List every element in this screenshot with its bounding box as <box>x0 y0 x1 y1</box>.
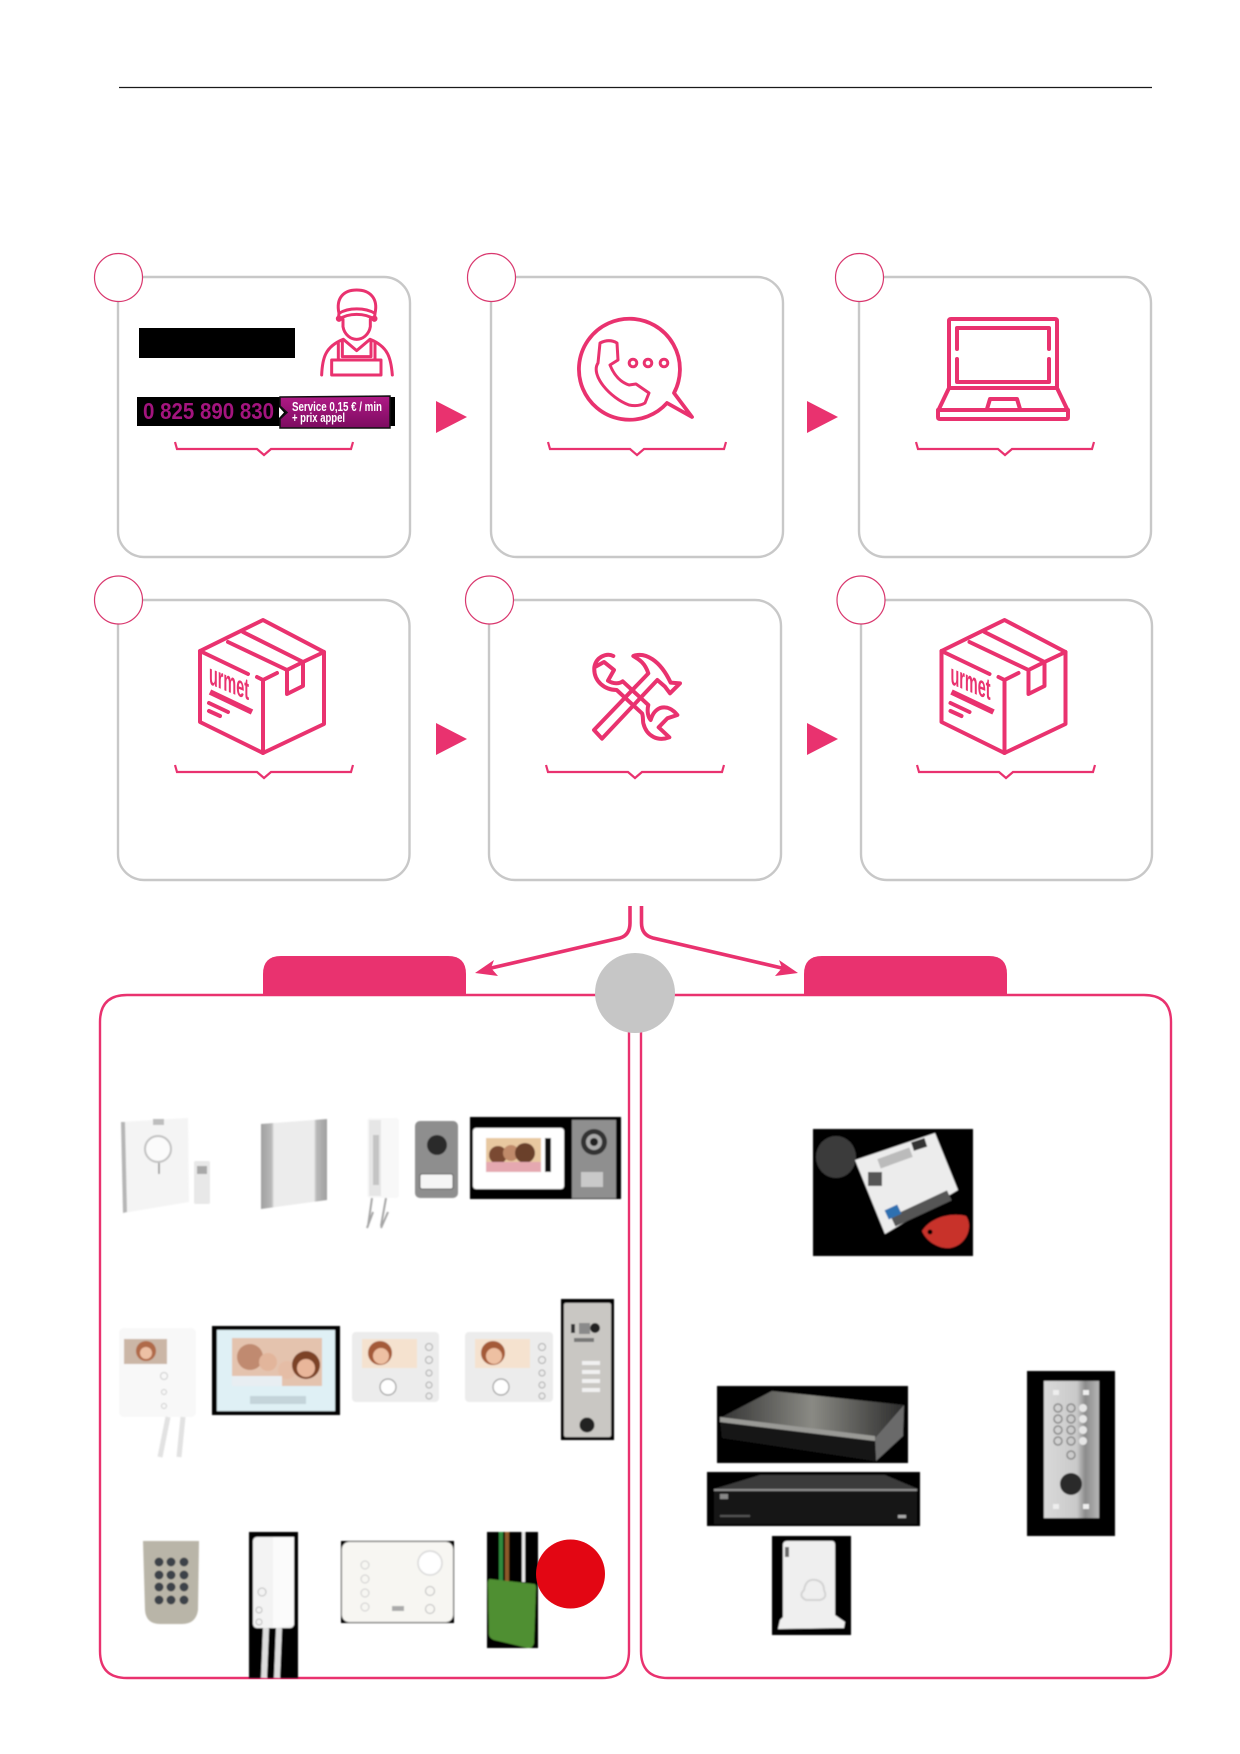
product: access control module <box>813 1129 973 1256</box>
price tag <box>280 396 390 428</box>
tab: left heading <box>263 956 466 995</box>
arrow 1 <box>436 401 467 433</box>
panel: left product range <box>100 956 629 1678</box>
product: monitor A <box>352 1332 439 1402</box>
step card 3: laptop <box>836 254 1151 557</box>
step number circle 4 <box>94 576 142 624</box>
product: green relay module <box>487 1532 538 1648</box>
step card 2: call <box>468 254 783 557</box>
icon: phone speech bubble <box>579 319 692 420</box>
heading bar <box>139 328 295 358</box>
product: steel keypad panel <box>1027 1371 1115 1536</box>
arrow 2 <box>807 401 838 433</box>
brace <box>175 442 353 455</box>
panel: right product range <box>641 956 1171 1678</box>
step number circle 3 <box>836 254 884 302</box>
top rule <box>119 86 1152 88</box>
red key fob <box>922 1215 969 1248</box>
icon: Urmet box <box>200 620 324 753</box>
price tag: + prix appel <box>292 411 345 425</box>
brace <box>916 442 1094 455</box>
product: flat recorder <box>717 1386 908 1463</box>
product: cloud box <box>772 1536 851 1635</box>
product: handset and door panel <box>367 1118 458 1228</box>
brace <box>175 765 353 778</box>
arrow 3 <box>436 723 467 755</box>
icon: Urmet box: urmet <box>950 658 991 708</box>
icon: Urmet box: urmet <box>209 658 249 708</box>
phone number banner <box>137 396 395 428</box>
step card 1: hotline <box>94 254 410 557</box>
product: white interphone on black <box>341 1541 454 1623</box>
product: wireless chime <box>121 1118 210 1213</box>
product: monitor with handset <box>119 1328 196 1457</box>
step card 5: repair <box>466 576 781 880</box>
step card 4: parcel <box>94 576 410 880</box>
brace <box>548 442 726 455</box>
reader dome <box>816 1136 856 1178</box>
icon: Urmet box <box>942 620 1066 753</box>
product: monitor B <box>465 1332 553 1402</box>
red dot <box>536 1540 605 1608</box>
phone number banner: 0 825 890 830 <box>143 398 274 424</box>
step number circle 1 <box>94 254 142 302</box>
product: door chime <box>261 1119 327 1209</box>
icon: technician <box>322 290 392 375</box>
brace <box>917 765 1095 778</box>
forked arrows <box>475 906 798 976</box>
price tag: Service 0,15 € / min <box>292 400 382 414</box>
product: handset on black <box>249 1532 298 1678</box>
step card 6: return parcel <box>837 576 1152 880</box>
icon: laptop <box>938 319 1068 419</box>
step number circle 2 <box>468 254 516 302</box>
product: keypad <box>143 1541 199 1624</box>
step number circle 6 <box>837 576 885 624</box>
product: black recorder <box>707 1472 920 1526</box>
arrow 4 <box>807 723 838 755</box>
brace <box>546 765 724 778</box>
tab: right heading <box>804 956 1007 995</box>
product: touch monitor on black <box>212 1326 340 1415</box>
product: multi-button door panel <box>561 1299 614 1440</box>
icon: crossed tools <box>594 655 680 739</box>
step number circle 5 <box>466 576 514 624</box>
product: video kit on black <box>470 1117 621 1199</box>
grey centre circle <box>595 953 675 1033</box>
